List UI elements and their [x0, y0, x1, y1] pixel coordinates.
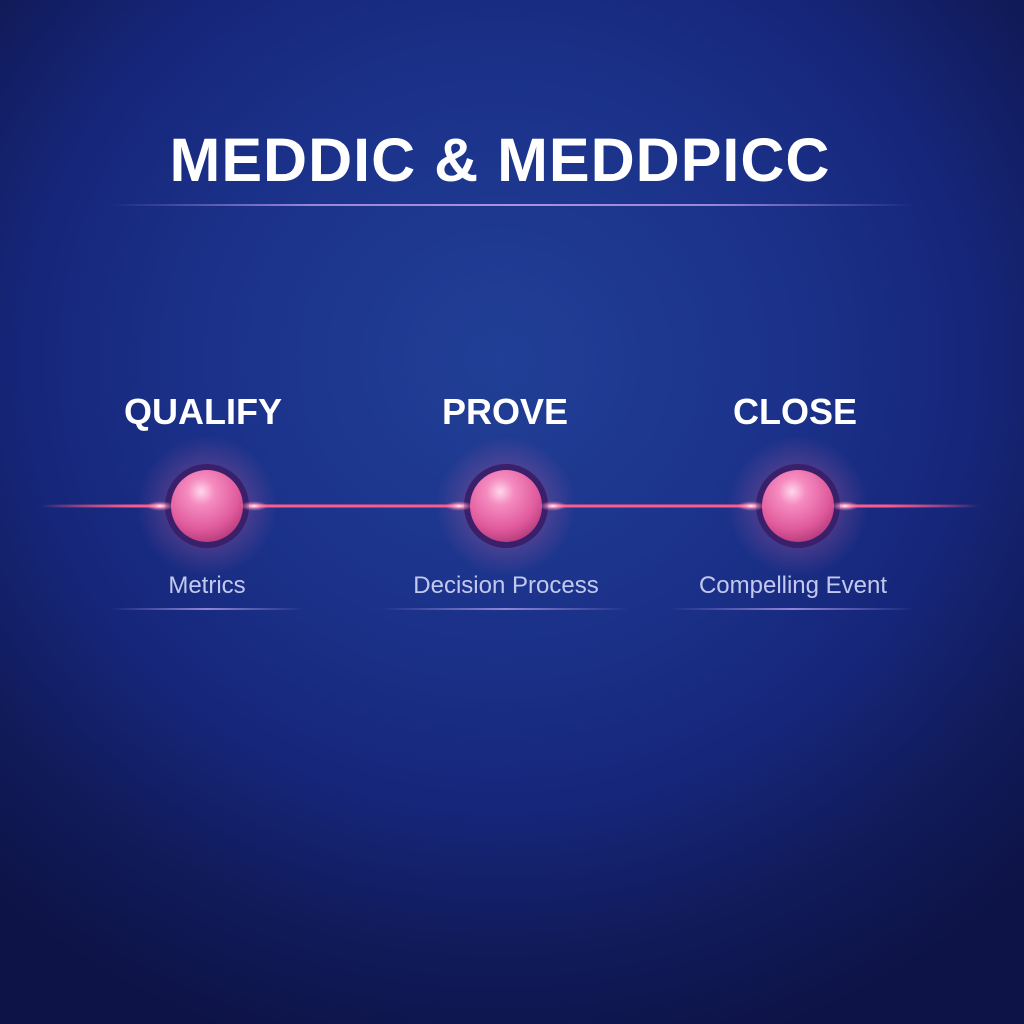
timeline with nodes — [42, 442, 978, 570]
heading: prove: PROVE — [442, 391, 568, 432]
label: decision process: Decision Process — [413, 572, 599, 599]
heading: close: CLOSE — [733, 391, 857, 432]
title: MEDDIC & MEDDPICC — [170, 126, 830, 194]
node: prove — [436, 436, 576, 576]
node: close — [728, 436, 868, 576]
label: metrics: Metrics — [168, 572, 246, 599]
label: compelling event: Compelling Event — [699, 572, 887, 599]
heading: qualify: QUALIFY — [124, 391, 282, 432]
node: qualify — [137, 436, 277, 576]
